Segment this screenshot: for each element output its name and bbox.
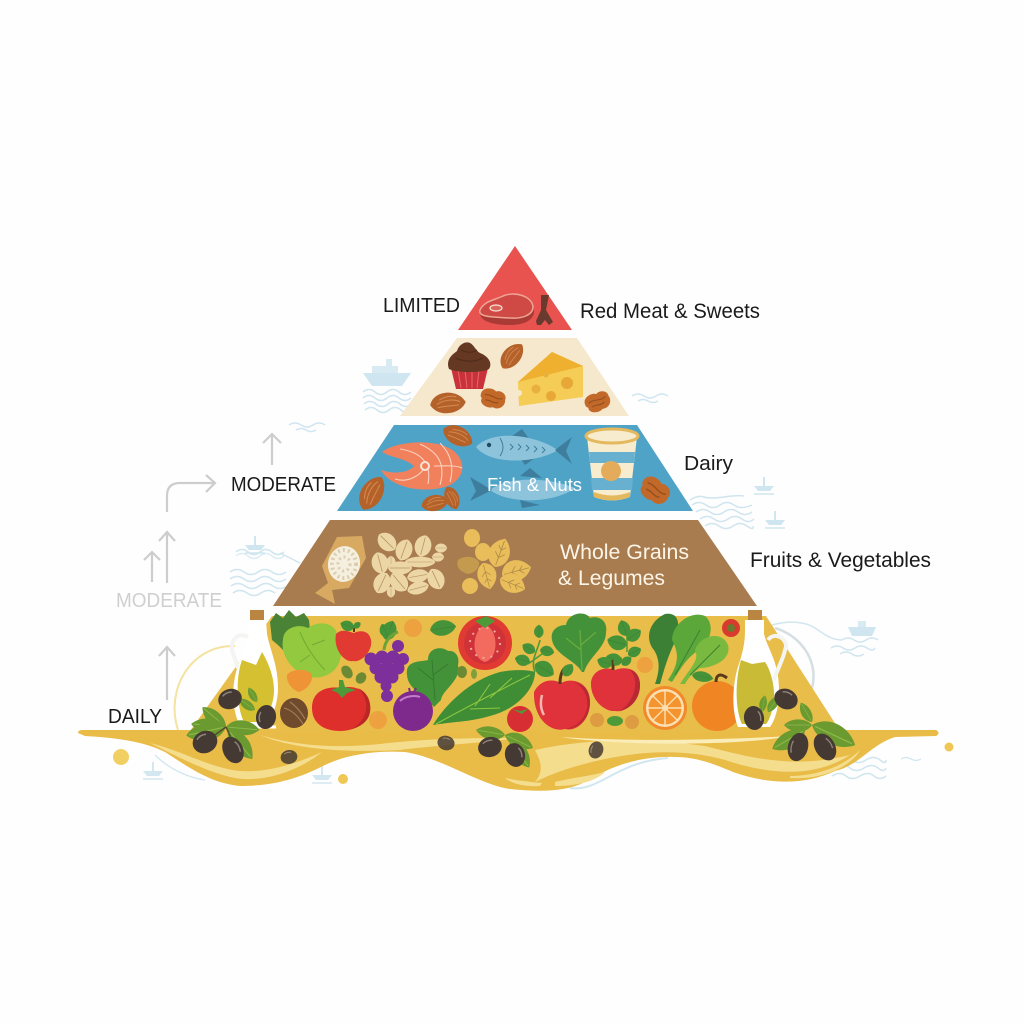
icon: apple left	[534, 661, 590, 730]
icon: fish top	[476, 429, 572, 465]
icon: plum	[393, 688, 433, 731]
icon: steak	[480, 294, 534, 325]
icon: olives on bottle left	[215, 685, 278, 731]
icon: right oil bottle	[733, 610, 786, 727]
label: red meat and sweets: Red Meat & Sweets	[580, 300, 760, 323]
icon: small bulbs	[590, 713, 639, 729]
icon: carrot	[287, 670, 312, 692]
icon: red tomato	[312, 680, 370, 731]
icon: spinach middle	[552, 614, 606, 672]
label: whole grains and legumes	[558, 541, 689, 590]
tier 5: fruits and vegetables	[190, 610, 840, 732]
icon: orange	[691, 670, 742, 731]
icon: yogurt cup	[586, 429, 638, 500]
label: fish and nuts: Fish & Nuts	[487, 475, 582, 495]
icon: kale	[270, 610, 310, 655]
icon: small bulb	[637, 657, 653, 673]
icon: cheese wedge	[516, 352, 583, 406]
label: limited: LIMITED	[383, 295, 460, 317]
icon: herb sprig right	[513, 625, 558, 681]
icon: olives on bottle right	[742, 685, 801, 732]
icon: herb sprig	[377, 618, 400, 642]
icon: small orange bulb	[404, 619, 422, 637]
icon: leaf	[429, 618, 457, 637]
label: whole grains and legumes: Whole Grains	[560, 541, 689, 564]
icon: green sprig	[604, 618, 644, 668]
label: moderate faded: MODERATE	[116, 590, 222, 612]
icon: small orange fruit	[369, 711, 387, 729]
icon: bone	[536, 295, 553, 325]
olive branches	[185, 685, 860, 771]
icon: large green leaf	[433, 670, 535, 725]
icon: cupcake	[448, 342, 490, 389]
icon: oats and beans	[369, 528, 448, 598]
icon: small tomato	[507, 706, 533, 732]
tier 4: whole grains and legumes	[273, 520, 757, 606]
icon: olive branch left	[185, 702, 260, 767]
tier 1: red meat and sweets	[458, 246, 572, 330]
label: fruits and vegetables: Fruits & Vegetables	[750, 549, 931, 572]
oil wave	[78, 730, 954, 791]
label: moderate: MODERATE	[231, 474, 336, 496]
icon: left oil bottle	[232, 610, 278, 727]
tier 3: fish and nuts	[337, 419, 693, 514]
decorative oil loops	[175, 628, 814, 730]
tier 2: sweets and dairy	[400, 338, 629, 416]
icon: loose olives	[280, 734, 606, 765]
icon: apple right	[591, 654, 640, 711]
background: sea waves and boats	[143, 359, 921, 788]
progress arrows	[144, 434, 281, 700]
icon: spinach bunch	[649, 614, 729, 684]
icon: tomato slice	[458, 616, 512, 670]
icon: almond and walnuts	[430, 386, 613, 415]
label: daily: DAILY	[108, 706, 162, 728]
icon: orange slice	[643, 686, 687, 730]
icon: walnut	[636, 473, 674, 509]
icon: olive branch right	[768, 700, 860, 764]
icon: golden leaves and legumes	[457, 529, 534, 597]
icon: grain sack	[315, 536, 366, 604]
icon: lettuce	[283, 623, 342, 678]
label: whole grains and legumes: & Legumes	[558, 567, 665, 590]
label: dairy: Dairy	[684, 453, 733, 475]
icon: red flower	[722, 619, 740, 637]
oil highlight bands	[150, 735, 860, 786]
icon: brown nut	[280, 698, 308, 728]
icon: grapes	[364, 632, 409, 702]
icon: salmon steak	[381, 442, 462, 490]
icon: olive branch centre	[475, 724, 536, 771]
icon: spinach	[407, 648, 459, 707]
icon: small olives	[339, 663, 477, 686]
icon: almond	[495, 339, 529, 373]
icon: almonds	[352, 419, 477, 514]
icon: fish bottom	[470, 468, 575, 508]
icon: red apple	[336, 618, 371, 661]
